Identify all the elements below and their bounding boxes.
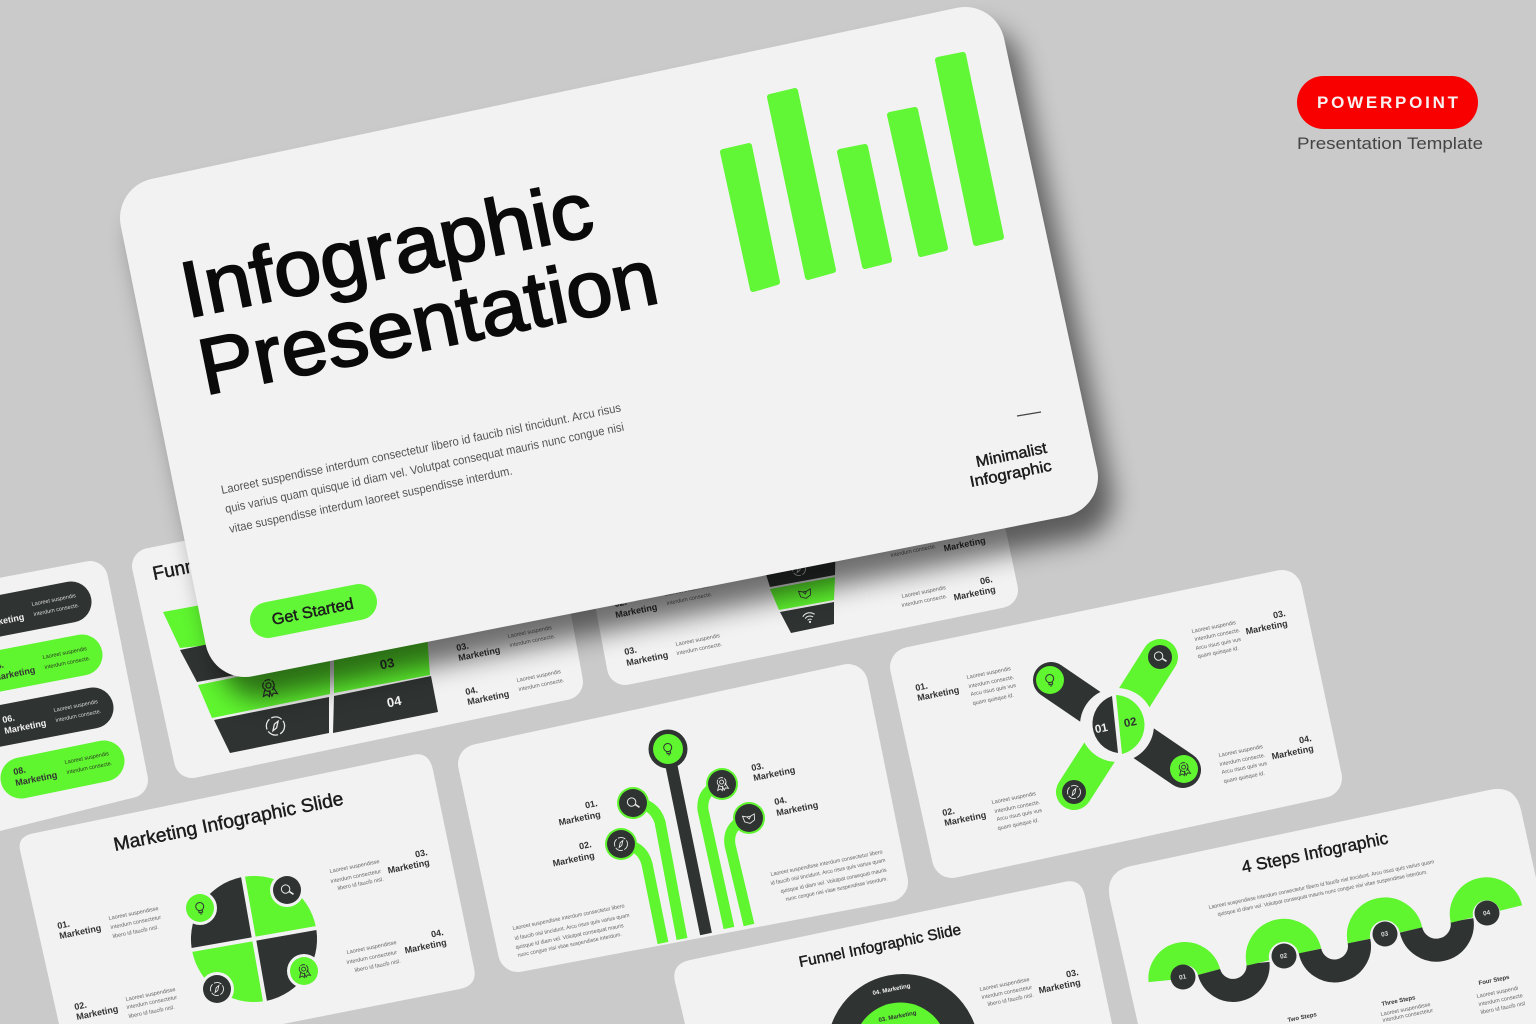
- heading: Funnel Infographic Slide: Funnel Infographic Slide: [797, 921, 962, 971]
- pill 08 green: [12, 751, 113, 788]
- tree paragraph right: Laoreet suspendisse interdum consectetur libero: [770, 849, 883, 878]
- icon: bulb end: [1036, 666, 1064, 694]
- funnel center labels: 03.: [623, 645, 638, 657]
- circle labels: interdum consectetur: [330, 869, 382, 885]
- funnel center labels: Laoreet suspendis: [901, 585, 947, 600]
- panel: pill list slide: [0, 579, 130, 850]
- side caption: [968, 412, 1053, 491]
- X labels: Laoreet suspendis: [1218, 744, 1264, 759]
- panel: main title card: [160, 47, 1058, 637]
- node: bulb: [183, 891, 217, 925]
- pill 08 green: interdum consecte.: [66, 761, 113, 776]
- heading: 4 Steps Infographic: 4 Steps Infographic: [1240, 828, 1390, 877]
- main card shadow: [175, 69, 1073, 659]
- badge: PowerPoint: [1297, 76, 1483, 153]
- circle labels: Laoreet suspendisse: [346, 940, 397, 956]
- X labels: interdum consecte.: [1194, 628, 1241, 643]
- panel: funnel slide left: [150, 490, 565, 760]
- circle labels: 04.: [430, 927, 444, 939]
- step dots: 01: [1178, 973, 1187, 982]
- X labels: Marketing: [1245, 618, 1288, 636]
- pill 02 dark: [0, 593, 80, 635]
- pill 04 green: interdum consecte.: [44, 656, 91, 671]
- funnel labels: interdum consecte.: [509, 634, 556, 649]
- step labels: Laoreet suspendi: [1476, 986, 1519, 1000]
- X diagram: 02: [1123, 716, 1138, 730]
- tree labels: [552, 761, 819, 868]
- funnel center labels: Marketing: [625, 650, 669, 668]
- X labels: Marketing: [916, 685, 960, 703]
- tree paragraph left: id faucib nisl tincidunt. Arcu risus quis varius quam: [514, 913, 630, 942]
- panel: X shape slide: [910, 590, 1322, 858]
- funnel center labels: 06.: [979, 574, 993, 586]
- circle labels: [56, 847, 447, 1022]
- step dots: 04: [1482, 909, 1491, 918]
- panel: marketing circle slide: [20, 754, 475, 1024]
- pill 06 dark: Laoreet suspendis: [53, 699, 99, 714]
- X labels: Arcu risus quis vus: [1221, 761, 1268, 776]
- pill 08 green: Marketing: [14, 770, 58, 788]
- X labels: Arcu risus quis vus: [970, 683, 1017, 698]
- X labels: Marketing: [943, 810, 987, 828]
- body paragraph: quis varius quam quisque id diam vel. Volutpat consequat mauris nunc congue nisi: [224, 420, 625, 516]
- circle labels: interdum consectetur: [126, 995, 178, 1011]
- funnel center labels: Marketing: [953, 584, 996, 602]
- funnel center labels: interdum consecte.: [901, 594, 948, 609]
- node: 01 search: [617, 787, 649, 819]
- pill 04 green: [0, 646, 91, 690]
- funnel semicircle labels: 03.: [1065, 967, 1079, 979]
- funnel labels: Marketing: [466, 689, 510, 707]
- funnel center labels: [613, 524, 996, 668]
- body paragraph: vitae suspendisse interdum laoreet suspendisse interdum.: [228, 464, 514, 536]
- X labels: 02.: [941, 806, 956, 818]
- step dots: 02: [1279, 952, 1288, 961]
- circle labels: Marketing: [75, 1004, 119, 1022]
- icon: search end: [1148, 645, 1172, 669]
- X labels: interdum consecte.: [968, 675, 1015, 690]
- tree paragraph right: [770, 849, 889, 903]
- funnel labels: Marketing: [457, 645, 501, 663]
- tree labels: Marketing: [752, 765, 796, 783]
- subtitle: Presentation Template: [1297, 134, 1483, 153]
- funnel center labels: 05.: [970, 524, 984, 536]
- circle labels: Marketing: [387, 857, 430, 875]
- funnel center labels: Laoreet suspendis: [664, 583, 710, 598]
- X labels: interdum consecte.: [1219, 753, 1266, 768]
- circle labels: libero id faucib nisl.: [128, 1005, 176, 1020]
- funnel segments: 04: [386, 693, 403, 710]
- funnel center labels: Marketing: [943, 535, 986, 553]
- X labels: 01.: [914, 681, 929, 693]
- icon: compass end: [1062, 780, 1086, 804]
- narrow funnel: [755, 525, 836, 633]
- funnel center labels: interdum consecte.: [666, 592, 713, 607]
- funnel semicircle labels: Laoreet suspendisse: [979, 977, 1030, 993]
- pill 06 dark: 06.: [1, 713, 16, 725]
- icon: award end: [1170, 755, 1198, 783]
- funnel semicircle labels: libero id faucib nisl.: [987, 993, 1035, 1008]
- step labels: [1287, 975, 1526, 1024]
- X labels: quam quisque id.: [972, 693, 1015, 707]
- funnel labels: interdum consecte.: [518, 678, 565, 693]
- node: search: [270, 873, 304, 907]
- funnel semicircle labels: Marketing: [1038, 977, 1081, 995]
- tree labels: Marketing: [775, 800, 819, 818]
- steps description: quisque id diam vel. Volutpat consequat mauris nunc congue nisi vitae suspendisse interdum.: [1217, 869, 1429, 918]
- node: 02 compass: [605, 828, 637, 860]
- node: top bulb: [648, 730, 688, 768]
- pill 08 green: Laoreet suspendis: [64, 751, 110, 766]
- funnel labels: 03.: [455, 641, 470, 653]
- funnel labels: Laoreet suspendis: [507, 625, 553, 640]
- title: Infographic: [173, 164, 600, 335]
- step labels: Three Steps: [1381, 995, 1417, 1008]
- X labels: interdum consecte.: [994, 800, 1041, 815]
- circle labels: libero id faucib nisl.: [354, 959, 402, 974]
- pill 06 dark: [0, 699, 102, 745]
- title: Presentation: [191, 232, 665, 412]
- X labels: Arcu risus quis vus: [1195, 637, 1242, 652]
- side caption: Infographic: [968, 458, 1053, 491]
- funnel labels: [455, 625, 565, 707]
- tree labels: 01.: [584, 798, 598, 810]
- funnel center labels: 02.: [613, 597, 628, 609]
- bar chart: [723, 55, 1001, 289]
- pill 06 dark: Marketing: [3, 718, 47, 736]
- circle labels: 03.: [414, 847, 428, 859]
- pill 02 dark: Laoreet suspendis: [31, 593, 77, 608]
- panel: funnel slide center: [590, 400, 1000, 668]
- circle labels: interdum consectetur: [346, 950, 398, 966]
- step labels: Laoreet suspendisse: [1380, 1002, 1431, 1018]
- funnel center labels: interdum consecte.: [890, 544, 937, 559]
- funnel center labels: Laoreet suspendis: [675, 633, 721, 648]
- side caption: Minimalist: [974, 440, 1049, 471]
- tree labels: Marketing: [558, 809, 601, 827]
- step dots: 03: [1380, 930, 1389, 939]
- pill 04 green: Laoreet suspendis: [42, 646, 88, 661]
- step labels: Four Steps: [1478, 975, 1511, 987]
- panel: funnel semicircle slide: [674, 881, 1112, 1024]
- slide heading: Funnel Infographic Slide: [151, 523, 356, 585]
- title: [173, 164, 665, 412]
- circle labels: Laoreet suspendisse: [125, 987, 176, 1003]
- tree paragraph left: Laoreet suspendisse interdum consectetur libero: [512, 903, 625, 932]
- tree paragraph right: quisque id diam vel. Volutpat consequat mauris: [780, 868, 887, 895]
- concentric funnel: 03. Marketing: [878, 1010, 917, 1024]
- tree chart: [605, 730, 765, 943]
- badge: PowerPoint: POWERPOINT: [1317, 93, 1459, 112]
- X labels: Laoreet suspendis: [1191, 620, 1237, 635]
- X diagram: 01: [1094, 722, 1109, 736]
- pill 02 dark: interdum consecte.: [33, 603, 80, 618]
- step labels: Two Steps: [1287, 1012, 1318, 1024]
- funnel center labels: interdum consecte.: [676, 642, 723, 657]
- funnel labels: Laoreet suspendis: [516, 669, 562, 684]
- panel: tree slide: [478, 684, 889, 959]
- funnel segments: [163, 605, 438, 753]
- circle labels: libero id faucib nisl.: [337, 877, 385, 892]
- tree labels: Marketing: [552, 850, 595, 868]
- tree paragraph left: quisque id diam vel. Volutpat consequat mauris: [515, 923, 624, 951]
- concentric funnel: [832, 974, 974, 1024]
- X labels: Laoreet suspendis: [966, 666, 1012, 681]
- circle labels: Marketing: [58, 923, 102, 941]
- X diagram: [1036, 645, 1198, 804]
- pill 06 dark: interdum consecte.: [55, 709, 102, 724]
- funnel center labels: Laoreet suspendis: [889, 535, 935, 550]
- step labels: interdum consectetur: [1382, 1008, 1434, 1024]
- button: Get Started: Get Started: [270, 596, 355, 629]
- circle labels: interdum consectetur: [110, 915, 162, 931]
- funnel semicircle labels: interdum consectetur: [981, 985, 1033, 1001]
- circle labels: 01.: [56, 919, 71, 931]
- tree labels: 04.: [773, 795, 788, 807]
- quadrant circle: [181, 866, 327, 1012]
- circle labels: libero id faucib nisl.: [112, 925, 160, 940]
- tree labels: 02.: [578, 839, 592, 851]
- circle labels: Laoreet suspendisse: [108, 906, 159, 922]
- circle labels: 02.: [73, 1000, 88, 1012]
- X labels: 03.: [1272, 608, 1286, 620]
- tree paragraph left: nunc congue nisi vitae suspendisse interdum.: [517, 932, 623, 959]
- X labels: Arcu risus quis vus: [996, 808, 1043, 823]
- funnel center labels: Marketing: [614, 602, 658, 620]
- step labels: interdum consecte: [1478, 993, 1523, 1008]
- tree labels: 03.: [750, 761, 765, 773]
- node: compass: [200, 972, 234, 1006]
- X labels: quam quisque id.: [1197, 646, 1240, 660]
- funnel segments: 03: [379, 655, 396, 672]
- node: 04 handshake: [733, 802, 765, 834]
- node: award: [287, 954, 321, 988]
- funnel labels: 04.: [464, 685, 479, 697]
- pill 08 green: 08.: [12, 765, 27, 777]
- funnel semicircle labels: [979, 967, 1081, 1008]
- X labels: 04.: [1298, 733, 1312, 745]
- X labels: quam quisque id.: [1223, 771, 1266, 785]
- X labels: Marketing: [1271, 743, 1314, 761]
- circle labels: Laoreet suspendisse: [329, 859, 380, 875]
- circle labels: Marketing: [404, 937, 447, 955]
- X labels: quam quisque id.: [997, 818, 1040, 832]
- panel: 4 steps slide: [1109, 789, 1536, 1024]
- tree paragraph right: id faucib nisl tincidunt. Arcu risus quis varius quam: [770, 858, 886, 887]
- X labels: Laoreet suspendis: [991, 791, 1037, 806]
- steps description: Laoreet suspendisse interdum consectetur libero id faucib nisl tincidunt. Arcu risus quis varius quam: [1208, 859, 1435, 911]
- tree paragraph right: nunc congue nisi vitae suspendisse interdum.: [785, 876, 889, 903]
- X labels: [914, 608, 1314, 832]
- body paragraph: Laoreet suspendisse interdum consectetur libero id faucib nisl tincidunt. Arcu risus: [220, 400, 622, 497]
- node: 03 award: [706, 768, 738, 800]
- concentric funnel: 04. Marketing: [872, 983, 911, 997]
- step dots: [1170, 900, 1500, 990]
- step labels: libero id faucib nisl: [1480, 1001, 1526, 1016]
- tree paragraph left: [512, 903, 630, 959]
- heading: Marketing Infographic Slide: Marketing Infographic Slide: [112, 789, 345, 856]
- wave path: [1160, 889, 1511, 990]
